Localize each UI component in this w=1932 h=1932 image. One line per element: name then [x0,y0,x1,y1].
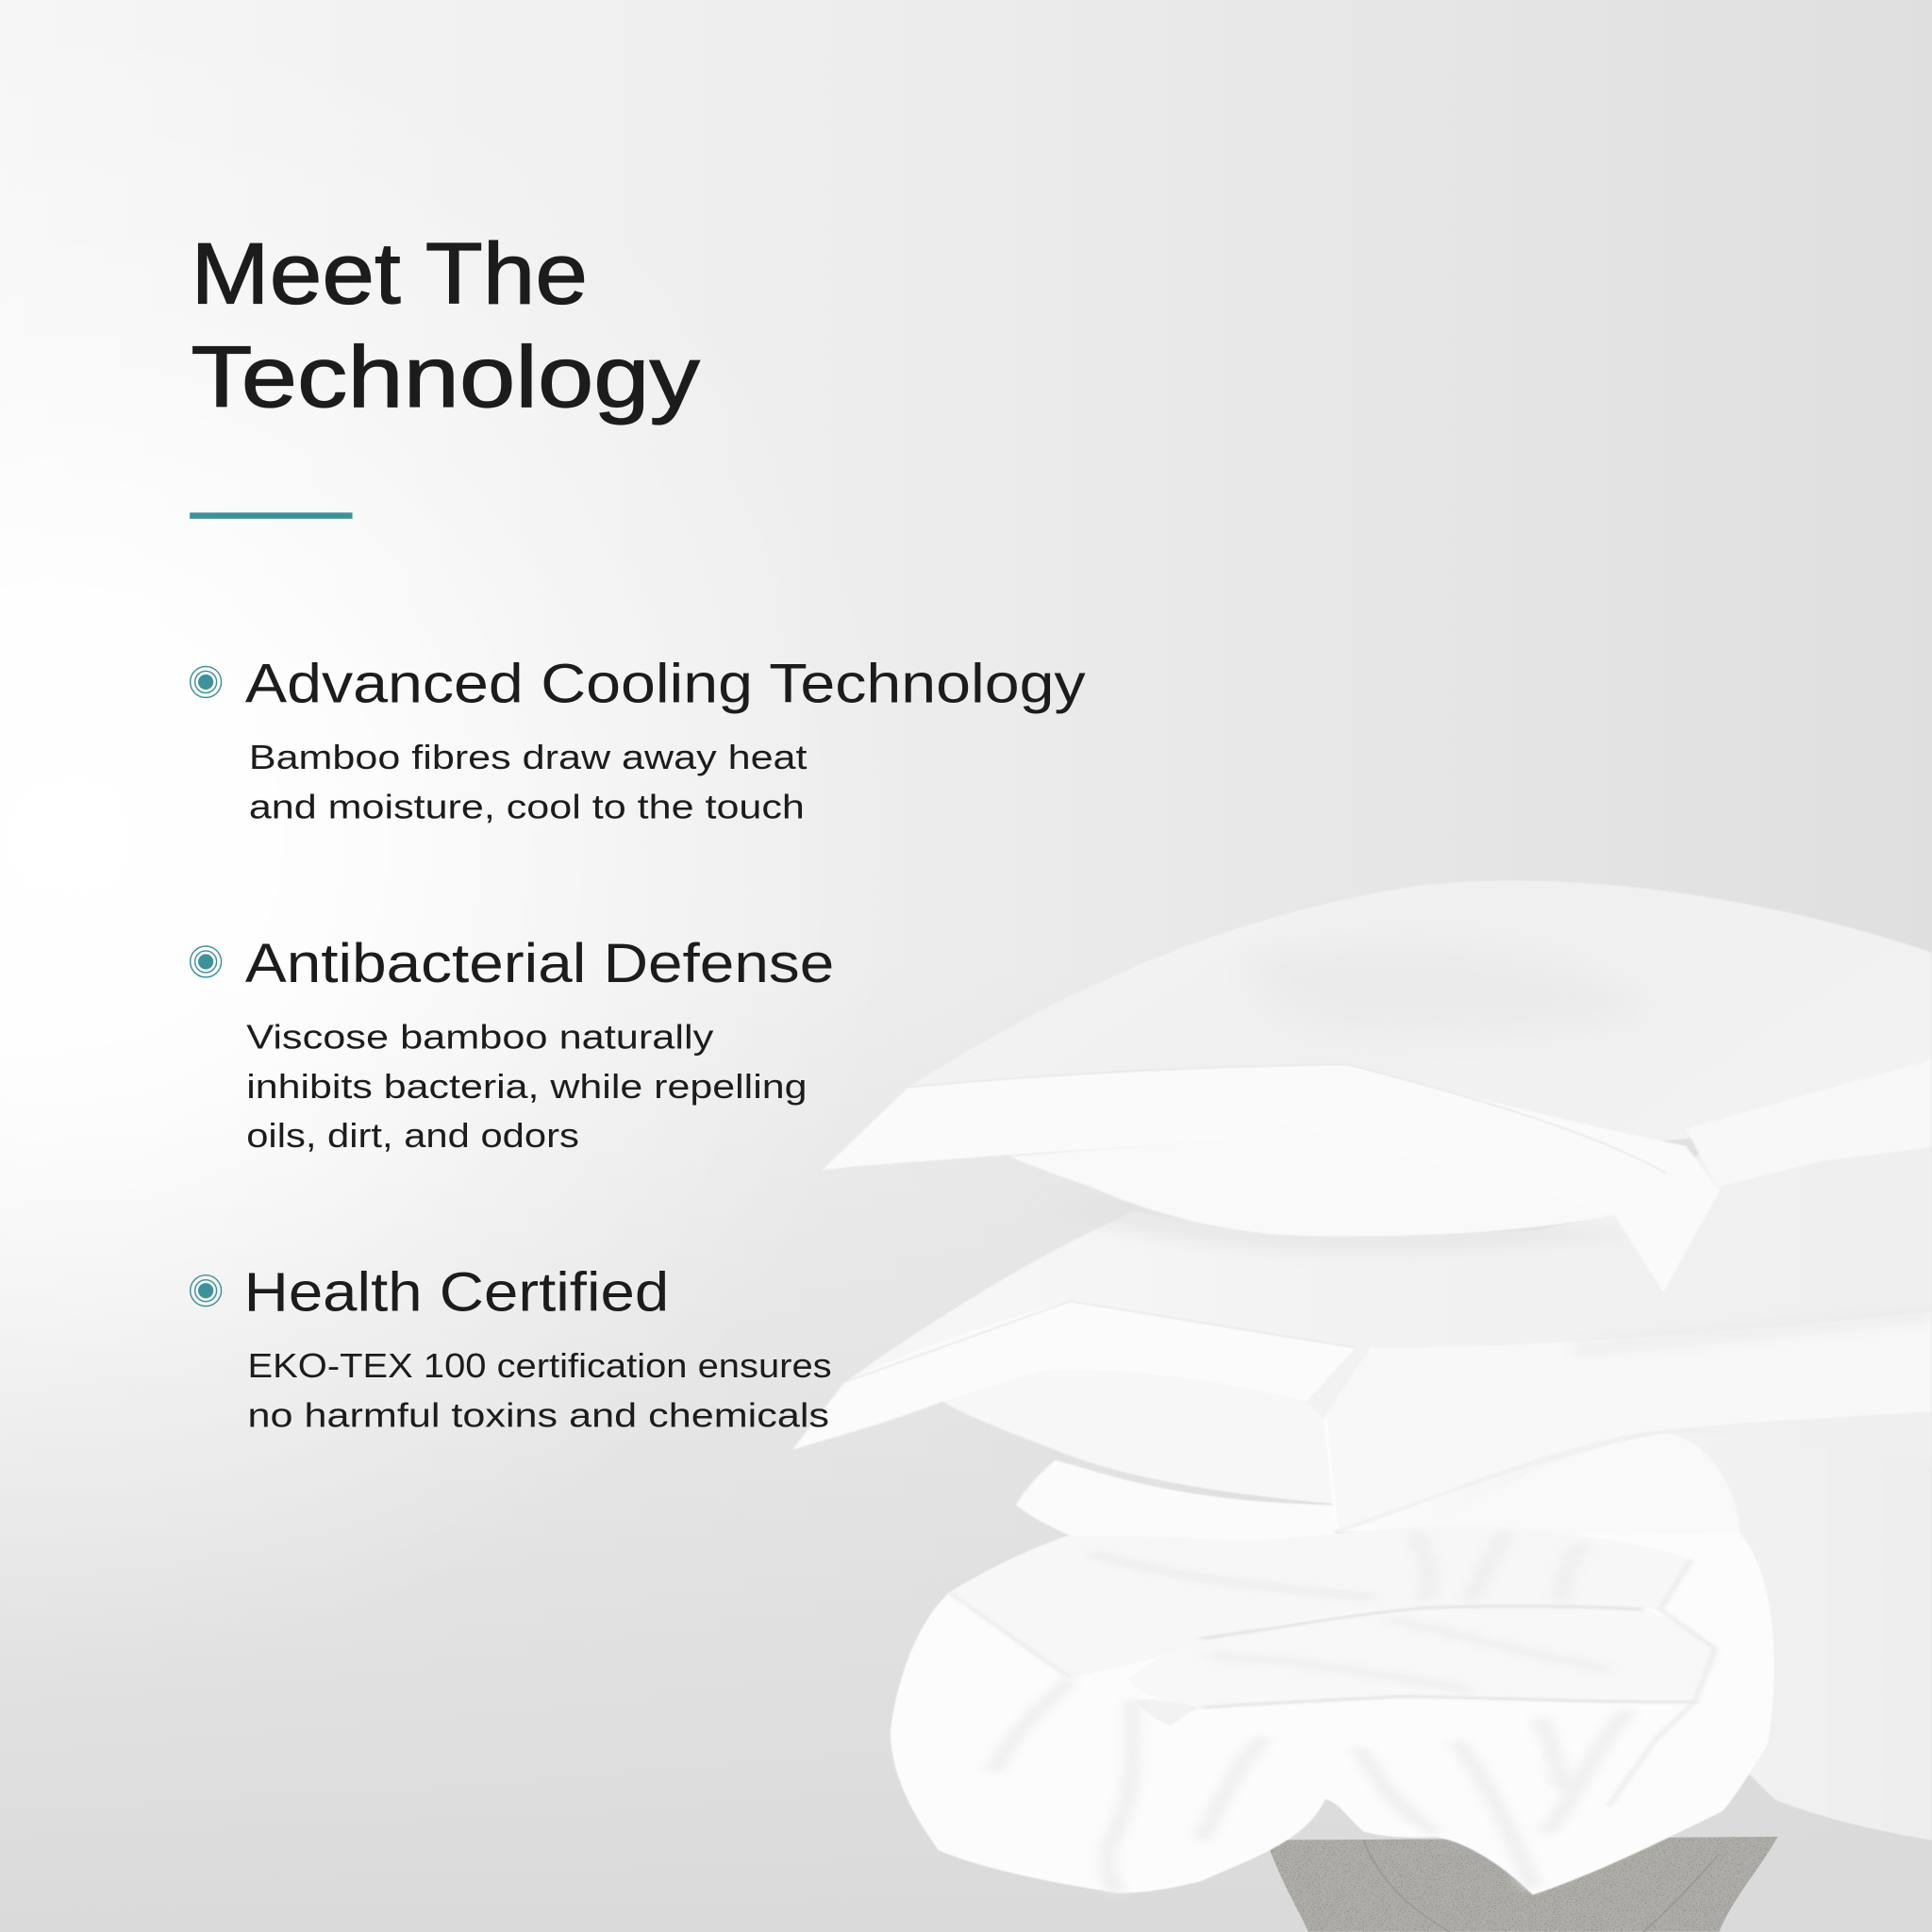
text: certification description: EKO-TEX 100 certification ensures [248,1346,832,1385]
heading: health certified: Health Certified [244,1262,669,1324]
right flange [1686,1059,1932,1188]
center tube [1128,1606,1716,1707]
text: antibacterial description: Viscose bamboo naturally [246,1018,714,1057]
icon: teal target bullet [191,1275,222,1307]
text: cooling description [249,738,808,825]
teal accent bar [190,512,353,519]
upper bedding in first crop coordinates [792,881,1932,1546]
feature: antibacterial defense [191,933,834,1155]
text: antibacterial description [246,1018,808,1155]
shadow lines around tube [1201,1606,1643,1639]
title: Technology [191,329,700,425]
comforter right mass [1346,1433,1932,1840]
icon: teal target bullet [191,666,222,697]
soft seam shadow [1574,1315,1932,1350]
left flange [792,1301,1356,1450]
pillow flange [823,1064,1720,1292]
comforter in lower crop coordinates [891,1433,1932,1895]
pillow body [845,1057,1932,1540]
second pillow [792,1057,1932,1540]
text: antibacterial description: inhibits bacteria, while repelling [246,1067,808,1106]
pinch under tube [1136,1699,1198,1725]
text: certification description: no harmful toxins and chemicals [248,1395,829,1434]
bedding photo illustration: pillows and comforter on stone pedestal [792,881,1932,1932]
pillow underside [1010,1122,1614,1237]
pillow face [908,881,1932,1146]
shadow under pillow [1040,1194,1641,1254]
stone pedestal [1267,1837,1778,1932]
feature: advanced cooling [191,653,1086,825]
pillow underside [942,1370,1333,1504]
pillow flange lower band [1322,1311,1932,1529]
heading: advanced cooling technology: Advanced Cooling Technology [245,653,1086,714]
text: antibacterial description: oils, dirt, and odors [246,1116,579,1155]
title: Meet The [191,225,588,322]
comforter roll outline [891,1525,1774,1895]
text: cooling description: and moisture, cool to the touch [249,787,805,825]
drape folds [1091,1533,1629,1888]
text: cooling description: Bamboo fibres draw away heat [249,738,808,776]
comforter lobe highlight [1436,1434,1740,1547]
upper band of roll [949,1525,1691,1678]
title [191,225,700,425]
feature: health certified [191,1262,832,1434]
text: certification description [248,1346,832,1434]
pillow shading [1242,942,1656,1032]
icon: teal target bullet [191,946,222,977]
heading: antibacterial defense: Antibacterial Defense [245,933,834,994]
folded sheet [1016,1460,1337,1546]
top pillow [823,881,1932,1292]
